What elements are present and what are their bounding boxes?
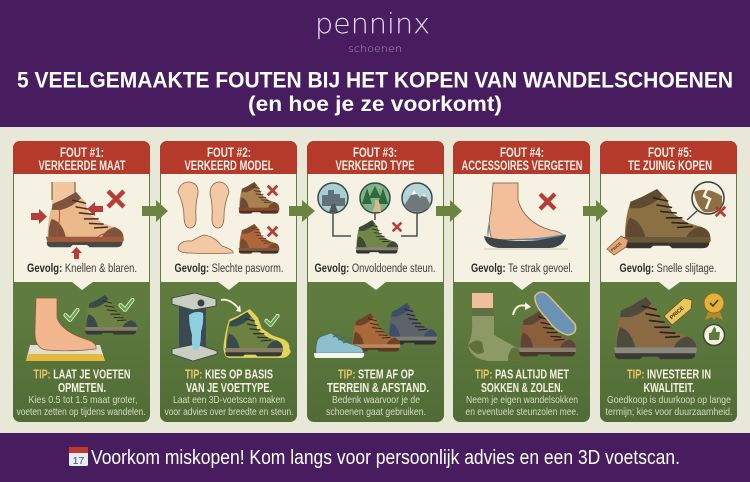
icon: sneaker: [314, 333, 364, 358]
tip text: schoenen gaat gebruiken.: [326, 406, 426, 418]
tip text: Neem je eigen wandelsokken: [466, 394, 578, 406]
panel: fout 4: [453, 141, 590, 422]
heading: fout 3: [336, 145, 414, 173]
icon: calendar: [69, 447, 88, 467]
tip text: voor advies over breedte en steun.: [164, 406, 294, 418]
heading: fout 1: [38, 145, 126, 173]
logo: penninx schoenen: penninx: [315, 7, 430, 40]
icon: calendar: 17: [73, 455, 84, 467]
icon: quality badge: [704, 293, 724, 320]
icon: matched boot with glow: [225, 311, 289, 356]
panel: fout 2: [160, 141, 297, 422]
tip text: TIP: KIES OP BASIS: [185, 366, 273, 382]
heading: fout 3: FOUT #3:: [353, 145, 397, 160]
tip text: [326, 366, 429, 418]
icon: city terrain circle: [318, 183, 348, 213]
icon: red cross: [542, 196, 553, 207]
footer text: Voorkom miskopen! Kom langs voor persoonlijk advies en een 3D voetscan.: [91, 447, 680, 469]
bottom purple band: [0, 433, 750, 482]
main beige background: [0, 127, 750, 433]
icon: foot in sandal: [484, 183, 568, 249]
heading: fout 2: [184, 145, 274, 173]
icon: boot too small: [46, 182, 124, 247]
panel: fout 1: [13, 141, 150, 422]
consequence text: Gevolg: Snelle slijtage.: [620, 263, 716, 275]
tip text: TIP: STEM AF OP: [338, 366, 414, 382]
heading: fout 4: ACCESSOIRES VERGETEN: [462, 158, 582, 173]
icon: sock: [468, 293, 524, 361]
consequence text: Gevolg: Slechte pasvorm.: [174, 263, 284, 275]
tip text: TIP: PAS ALTIJD MET: [475, 366, 569, 382]
icon: yellow price tag: [664, 298, 692, 325]
tip text: [606, 366, 732, 418]
icon: thumbs up: [704, 324, 724, 346]
arrow 3 to 4: [436, 200, 462, 222]
arrow 1 to 2: [142, 200, 168, 222]
tip text: [466, 366, 578, 418]
tip text: Bedenk waarvoor je de: [332, 394, 420, 406]
tip text: SOKKEN & ZOLEN.: [481, 380, 563, 395]
icon: red cross: [110, 193, 122, 205]
heading: fout 2: VERKEERD MODEL: [184, 158, 274, 173]
logo: penninx schoenen: schoenen: [348, 44, 402, 55]
title: 5 VEELGEMAAKTE FOUTEN BIJ HET KOPEN VAN WANDELSCHOENEN: [17, 68, 733, 92]
tip text: [164, 366, 294, 418]
icon: hiking boot with arrow: [513, 302, 576, 356]
logo: penninx schoenen: [315, 7, 430, 55]
icon: forest terrain circle: [360, 183, 390, 213]
tip text: TERREIN & AFSTAND.: [327, 380, 429, 395]
tip text: [16, 366, 146, 418]
icon: insole: [535, 292, 576, 335]
heading: fout 4: [462, 145, 582, 173]
icon: price tag: PRICE: [610, 241, 623, 253]
arrow 4 to 5: [583, 200, 608, 222]
icon: quality boot: [614, 297, 697, 359]
heading: fout 5: [628, 145, 712, 173]
consequence text: Gevolg: Onvoldoende steun.: [314, 263, 436, 275]
icon: pressure arrows: [31, 202, 103, 259]
tip text: OPMETEN.: [58, 380, 106, 395]
icon: worn brown boot: [623, 189, 711, 248]
icon: mountain terrain circle: [402, 183, 432, 213]
icon: 3D foot scanner: [172, 293, 241, 361]
tip text: VAN JE VOETTYPE.: [186, 380, 272, 395]
consequence text: Gevolg: Te strak gevoel.: [471, 263, 573, 275]
tip text: TIP: LAAT JE VOETEN: [34, 366, 130, 382]
icon: two wrong boots: [238, 182, 279, 254]
icon: green boot with checks: [66, 295, 137, 334]
icon: wrong type boot: [355, 220, 400, 254]
tip text: voeten zetten op tijdens wandelen.: [16, 406, 146, 418]
heading: fout 1: VERKEERDE MAAT: [38, 158, 126, 173]
icon: magnified crack: [687, 182, 724, 220]
heading: fout 1: FOUT #1:: [60, 145, 104, 160]
title: [17, 68, 733, 116]
icon: price tag: [607, 236, 628, 255]
footer call to action: [69, 447, 680, 469]
icon: foot on ruler: [26, 298, 105, 361]
title: (en hoe je ze voorkomt): [248, 93, 502, 116]
panel: fout 3: [307, 141, 444, 422]
panel: fout 5: [600, 141, 737, 422]
consequence text: Gevolg: Knellen & blaren.: [27, 263, 137, 275]
top purple band: [0, 0, 750, 127]
heading: fout 5: FOUT #5:: [648, 145, 692, 160]
tip text: Kies 0.5 tot 1.5 maat groter,: [28, 394, 138, 406]
icon: three shoes: [314, 303, 437, 358]
tip text: TIP: INVESTEER IN: [627, 366, 711, 382]
tip text: Laat een 3D-voetscan maken: [173, 394, 285, 406]
tip text: KWALITEIT.: [644, 380, 694, 395]
arrow 2 to 3: [289, 200, 315, 222]
heading: fout 3: VERKEERD TYPE: [336, 158, 414, 173]
tip text: en eventuele steunzolen mee.: [466, 406, 578, 418]
heading: fout 2: FOUT #2:: [207, 145, 251, 160]
icon: yellow price tag: PRICE: [669, 305, 686, 321]
heading: fout 5: TE ZUINIG KOPEN: [628, 158, 712, 173]
connectors: [333, 213, 417, 236]
icon: feet soles and arch: [178, 182, 233, 254]
heading: fout 4: FOUT #4:: [500, 145, 544, 160]
